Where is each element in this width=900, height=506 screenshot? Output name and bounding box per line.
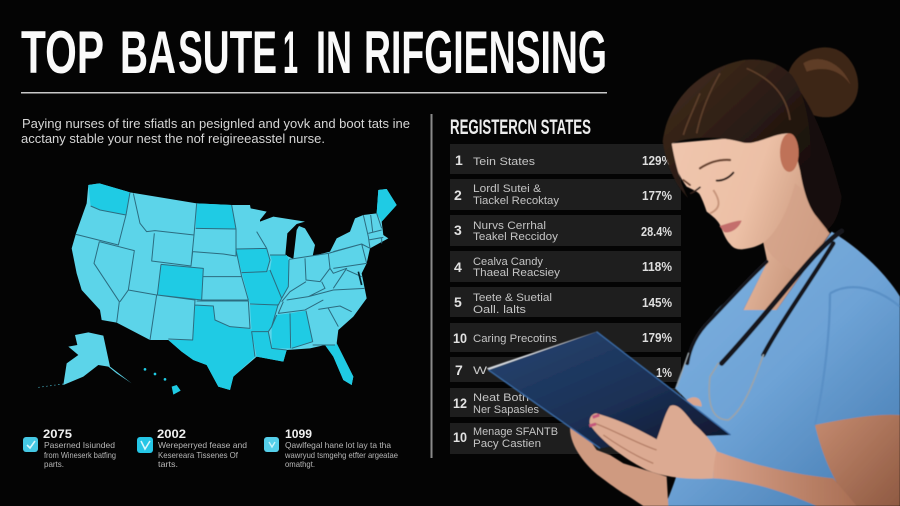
table: registered states: 10	[453, 330, 467, 346]
milestone 3: omathgt.	[285, 459, 315, 469]
fingernails	[589, 415, 599, 426]
thumb behind book	[687, 397, 702, 407]
milestone 2: 2002	[157, 427, 186, 441]
milestone 3	[264, 427, 398, 469]
book	[487, 332, 731, 448]
intro text	[21, 117, 410, 146]
table: registered states: Caring Precotins	[473, 333, 558, 345]
stethoscope	[677, 231, 842, 420]
ear	[780, 133, 799, 172]
table: registered states: Teakel Reccidoy	[473, 231, 559, 243]
milestone 2: Wereperryed fease and	[158, 440, 247, 450]
intro text: acctany stable your nest the nof reigireeasstel nurse.	[21, 132, 325, 146]
scrub top	[665, 232, 900, 506]
intro text: Paying nurses of tire sfiatls an pesignled and yovk and boot tats ine	[22, 117, 410, 131]
hair highlight	[683, 68, 790, 135]
title	[21, 19, 607, 86]
hair back and bun	[773, 47, 858, 230]
title: 1	[283, 19, 298, 86]
table: registered states: Oall. lalts	[473, 304, 527, 316]
map: United States	[38, 183, 397, 395]
nose shadow	[710, 190, 719, 213]
finger lines	[595, 423, 657, 463]
table: registered states: 177%	[642, 188, 672, 203]
sleeve fold	[815, 287, 900, 425]
state borders	[76, 192, 383, 357]
table: registered states: Tiackel Recoktay	[473, 195, 560, 207]
table: registered states	[450, 144, 681, 454]
milestone 1	[23, 427, 116, 469]
table: registered states: 7	[455, 362, 463, 378]
table: registered states: Cealva Candy	[473, 256, 544, 268]
title: BA	[120, 19, 176, 86]
table: registered states: 10	[453, 429, 467, 445]
milestone 3: wawryud tsmgehg etfter argeatae	[284, 450, 398, 460]
table heading: REGISTERCN STATES	[450, 116, 591, 139]
jaw shadow	[763, 183, 828, 273]
divider	[430, 114, 432, 458]
title: IN	[316, 19, 352, 86]
table: registered states: Menage SFANTB	[473, 426, 558, 438]
eyes and brows	[683, 160, 733, 193]
title: SUTE	[178, 19, 277, 86]
table: registered states: 1%	[656, 365, 672, 380]
milestone 3: 1099	[285, 427, 312, 441]
table: registered states: Teete & Suetial	[473, 292, 552, 304]
table: registered states: Nurvs Cerrhal	[473, 220, 546, 232]
table: registered states: 4	[454, 259, 462, 275]
milestone 3: Qawlfegal hane lot lay ta tha	[285, 440, 391, 450]
table: registered states: 3	[454, 222, 462, 238]
left hand	[570, 426, 668, 506]
table: registered states: Lordl Sutei &	[473, 183, 542, 195]
milestone 1: 2075	[43, 427, 72, 441]
table: registered states: Tein States	[473, 156, 536, 168]
table: registered states: 28.4%	[641, 224, 672, 239]
table: registered states: 145%	[642, 295, 672, 310]
nurse figure	[487, 47, 900, 506]
table: registered states: W	[473, 365, 488, 377]
upper arm	[815, 415, 900, 506]
face and neck	[672, 130, 830, 310]
table: registered states: 179%	[642, 330, 672, 345]
milestone 2: Kesereara Tissenes Of	[158, 450, 239, 460]
title: TOP	[21, 19, 104, 86]
forearm	[713, 450, 857, 506]
lips	[719, 221, 742, 233]
milestone 1: from Wineserk batfing	[44, 450, 116, 460]
table: registered states: 1	[455, 152, 463, 168]
table: registered states: 129%	[642, 153, 672, 168]
milestone 1: parts.	[44, 459, 64, 469]
table: registered states: Thaeal Reacsiey	[473, 267, 561, 279]
title: RIFGIENSING	[364, 19, 607, 86]
table: registered states: Neat Both	[473, 392, 529, 404]
milestone 2: tarts.	[158, 459, 178, 469]
hair	[663, 59, 811, 198]
milestone 2	[137, 427, 247, 469]
table: registered states: 5	[454, 294, 462, 310]
milestone 1: Paserned Isiunded	[44, 440, 115, 450]
right hand	[590, 405, 717, 479]
table: registered states: 12	[453, 395, 467, 411]
table: registered states: Ner Sapasles	[473, 404, 539, 416]
table: registered states: 2	[454, 187, 462, 203]
table: registered states: Pacy Castien	[473, 438, 541, 450]
table: registered states: 118%	[642, 259, 672, 274]
